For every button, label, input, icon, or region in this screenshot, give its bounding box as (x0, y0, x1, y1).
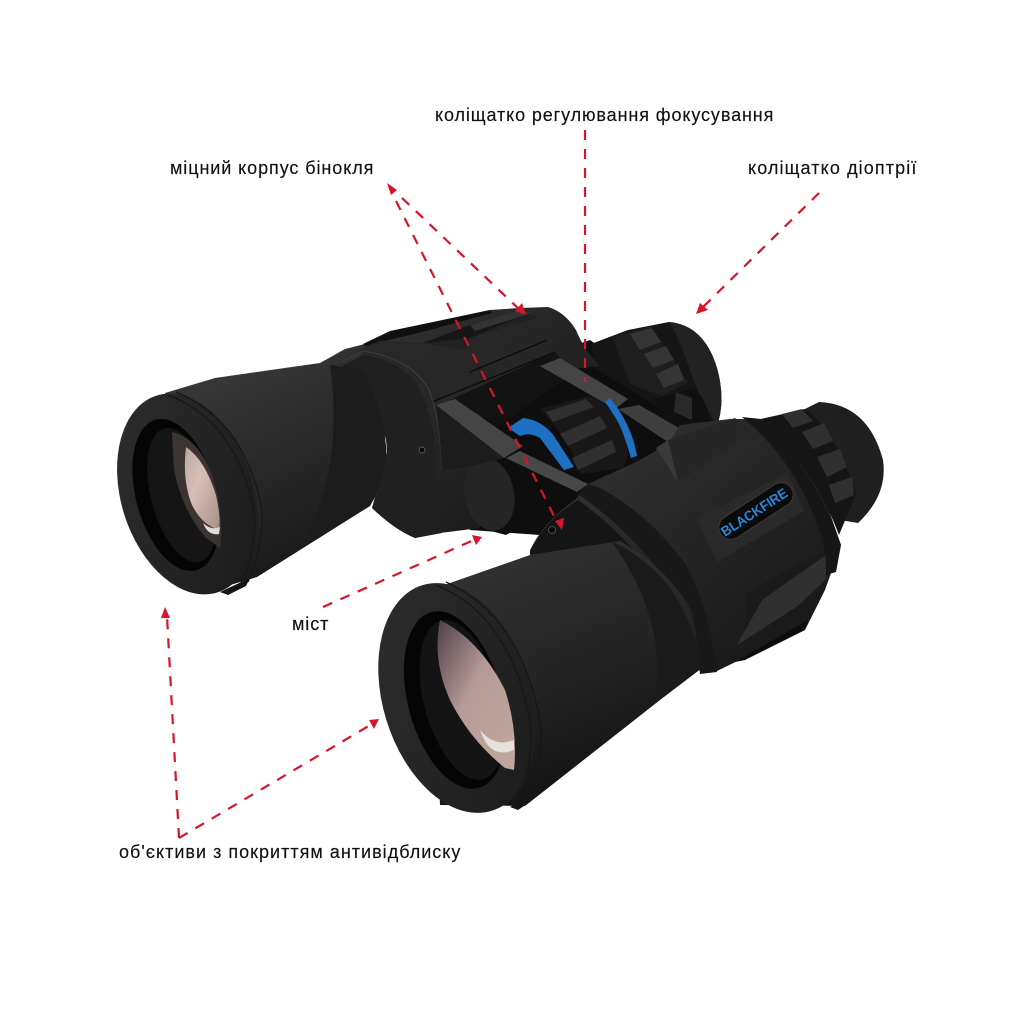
label: focus ring: коліщатко регулювання фокусування (435, 105, 774, 125)
bridge plates (436, 358, 693, 492)
rear eyepiece of left barrel (591, 322, 722, 432)
knurled hinge knob (457, 453, 545, 535)
band near eyepiece (742, 417, 841, 575)
leader: right objective lens (179, 724, 372, 838)
textured lower grip (737, 548, 831, 645)
textured top grip (423, 310, 538, 350)
front rubber rim (94, 376, 280, 612)
left objective barrel (94, 363, 386, 612)
left lens (117, 409, 235, 581)
right prism housing (530, 417, 841, 674)
dark fill behind bridge (436, 340, 710, 535)
leader: body to top grip (402, 198, 520, 310)
label: dioptre ring: коліщатко діоптрії (748, 158, 917, 178)
arrowheads (161, 183, 708, 729)
left barrel body with prism housing (320, 307, 600, 538)
leader: focus ring (584, 130, 586, 382)
label: lenses: об'єктиви з покриттям антивідблиску (119, 842, 461, 862)
right eyepiece (761, 402, 884, 535)
focus wheel with blue ring (508, 396, 637, 474)
label: bridge: міст (292, 614, 329, 634)
leader: bridge (323, 539, 476, 607)
collar band (578, 484, 717, 674)
leader: dioptre ring (702, 193, 819, 308)
binoculars photo illustration (94, 307, 884, 832)
prism housing front (342, 355, 442, 538)
textured upper grip (656, 418, 752, 482)
leader: body through bridge (396, 201, 558, 524)
brand name: BLACKFIRE (718, 485, 790, 540)
callout leaders (167, 130, 819, 838)
right objective barrel (352, 541, 702, 832)
label: body: міцний корпус бінокля (170, 158, 374, 178)
badge plate (696, 473, 804, 562)
leader: left objective lens (167, 616, 179, 838)
right lens (386, 600, 524, 800)
front rubber rim (352, 564, 562, 832)
